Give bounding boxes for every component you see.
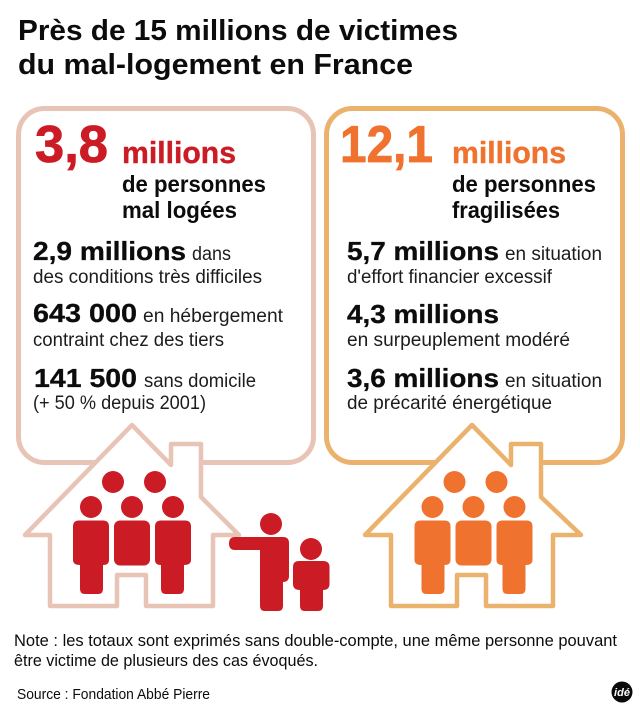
text block: 2,9 millions: 2,9 millions <box>33 236 186 266</box>
text block: 141 500: sans domicile <box>144 371 256 392</box>
house outline left <box>25 425 239 606</box>
text block: 141 500: 141 500 <box>34 363 137 393</box>
source: Source : Fondation Abbé Pierre <box>17 686 210 703</box>
text block: 5,7 millions <box>347 236 602 288</box>
icon: house left with family <box>25 425 239 606</box>
panel outline: right <box>326 108 622 462</box>
text block: 4,3 millions: en surpeuplement modéré <box>347 330 570 351</box>
text block: 643 000: contraint chez des tiers <box>33 330 224 351</box>
note: être victime de plusieurs des cas évoqués. <box>14 651 318 670</box>
text block: 2,9 millions: dans <box>192 244 231 265</box>
text block: 3,6 millions: en situation <box>505 371 602 392</box>
text block: 2,9 millions <box>33 236 262 288</box>
text block: 3,6 millions <box>347 363 602 414</box>
text block: 5,7 millions: 5,7 millions <box>347 236 499 266</box>
icon: adult and child outside <box>229 513 330 611</box>
text block: 643 000: en hébergement <box>143 306 284 327</box>
panel: personnes fragilisées <box>326 108 622 462</box>
text block: 5,7 millions: d'effort financier excessif <box>347 267 553 288</box>
panel: personnes mal logées <box>18 108 314 462</box>
headline: 12,1 millions: 12,1 <box>340 116 433 174</box>
text block: 4,3 millions: 4,3 millions <box>347 299 499 329</box>
people in house right <box>414 471 532 594</box>
text block: 4,3 millions <box>347 299 570 351</box>
text block: 141 500 <box>33 363 256 414</box>
text block: 3,6 millions: 3,6 millions <box>347 363 499 393</box>
house outline right <box>365 425 581 606</box>
text block: 141 500: (+ 50 % depuis 2001) <box>33 393 206 414</box>
people in house left <box>73 471 191 594</box>
title <box>18 15 458 81</box>
text block: 643 000: 643 000 <box>33 298 137 328</box>
headline: 3,8 millions: de personnes <box>122 171 266 197</box>
headline: 12,1 millions: millions <box>452 135 566 170</box>
headline: 12,1 millions: fragilisées <box>452 197 560 223</box>
text block: 643 000 <box>33 298 284 351</box>
text block: 5,7 millions: en situation <box>505 244 602 265</box>
logo: idé: idé <box>614 687 630 699</box>
headline: 3,8 millions: millions <box>122 135 236 170</box>
logo: idé <box>612 682 632 702</box>
text block: 2,9 millions: des conditions très difficiles <box>33 267 262 288</box>
note: Note : les totaux sont exprimés sans double-compte, une même personne pouvant <box>14 631 617 650</box>
headline: 12,1 millions: de personnes <box>452 171 596 197</box>
headline: 3,8 millions: mal logées <box>122 197 237 223</box>
title: du mal-logement en France <box>18 49 413 81</box>
icon: house right with family <box>365 425 581 606</box>
title: Près de 15 millions de victimes <box>18 15 458 47</box>
panel outline: left <box>18 108 314 462</box>
note <box>14 631 617 670</box>
headline: 3,8 millions: 3,8 <box>35 116 108 174</box>
headline: 12,1 millions <box>340 116 596 223</box>
text block: 3,6 millions: de précarité énergétique <box>347 393 552 414</box>
headline: 3,8 millions <box>35 116 266 223</box>
